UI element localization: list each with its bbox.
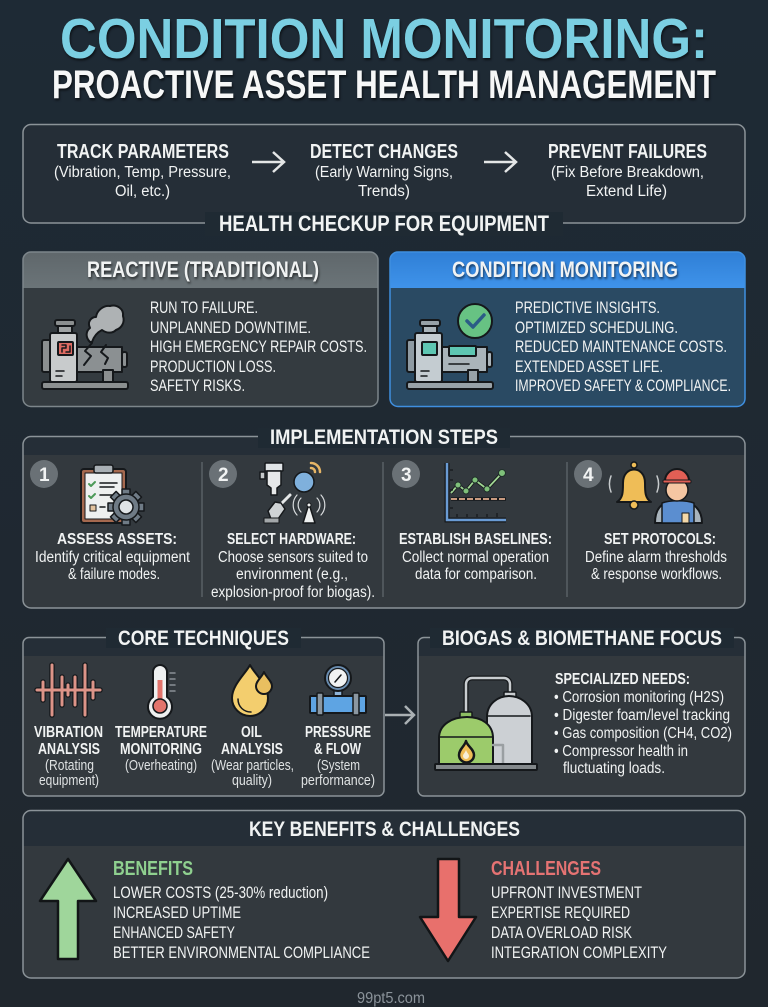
icon: baseline chart xyxy=(447,463,506,520)
step: detect changes: DETECT CHANGES xyxy=(310,141,458,163)
technique: pressure xyxy=(301,665,375,789)
badge 1 xyxy=(30,460,58,488)
text: challenges xyxy=(491,858,667,962)
text: temperature: MONITORING xyxy=(120,741,202,758)
text: reactive list: HIGH EMERGENCY REPAIR COSTS. xyxy=(150,338,367,356)
text: challenges: EXPERTISE REQUIRED xyxy=(491,904,630,922)
text: vibration: (Rotating xyxy=(45,757,94,774)
panel: implementation steps xyxy=(23,426,745,608)
badge 2: 2 xyxy=(218,465,229,486)
text: challenges: DATA OVERLOAD RISK xyxy=(491,924,632,942)
text: benefits: BENEFITS xyxy=(113,858,193,880)
step: track parameters: (Vibration, Temp, Pressure, xyxy=(54,164,231,181)
footer: site name: 99pt5.com xyxy=(357,990,425,1007)
title: CONDITION MONITORING: xyxy=(60,7,708,71)
text: benefits xyxy=(113,858,370,962)
badge 4 xyxy=(574,460,602,488)
text: pressure: PRESSURE xyxy=(305,724,371,741)
text: assess assets: & failure modes. xyxy=(68,566,160,583)
text: reactive list: SAFETY RISKS. xyxy=(150,377,245,395)
text: establish baselines xyxy=(399,531,552,583)
text: select hardware: Choose sensors suited to xyxy=(218,549,368,566)
heading: implementation steps: IMPLEMENTATION STEPS xyxy=(270,426,498,449)
text: benefits: BETTER ENVIRONMENTAL COMPLIANCE xyxy=(113,944,370,962)
badge 1: 1 xyxy=(39,465,50,486)
text: challenges: INTEGRATION COMPLEXITY xyxy=(491,944,667,962)
heading: key benefits and challenges: KEY BENEFITS & CHALLENGES xyxy=(249,818,520,841)
step: track parameters: TRACK PARAMETERS xyxy=(57,141,229,163)
heading: core techniques: CORE TECHNIQUES xyxy=(118,627,289,650)
step: detect changes: Trends) xyxy=(358,183,410,200)
text: benefits: LOWER COSTS (25-30% reduction) xyxy=(113,884,328,902)
icon: vibration wave xyxy=(37,665,100,715)
text: pressure: performance) xyxy=(301,772,375,789)
text: temperature: (Overheating) xyxy=(125,757,197,774)
text: reactive list xyxy=(150,299,367,395)
text: assess assets: ASSESS ASSETS: xyxy=(57,531,177,548)
badge 3 xyxy=(392,460,420,488)
text: specialized needs: • Compressor health in xyxy=(554,743,688,760)
step 1 xyxy=(30,460,191,583)
text: oil: (Wear particles, xyxy=(211,757,294,774)
heading: health checkup for equipment: HEALTH CHECKUP FOR EQUIPMENT xyxy=(219,211,549,236)
text: specialized needs: • Corrosion monitoring (H2S) xyxy=(554,689,724,706)
icon: digester tanks xyxy=(435,678,537,770)
text: monitoring list xyxy=(515,299,731,395)
arrow xyxy=(252,152,284,172)
text: set protocols: Define alarm thresholds xyxy=(585,549,727,566)
text: select hardware: explosion-proof for biogas). xyxy=(211,584,375,601)
panel: condition monitoring xyxy=(390,252,745,406)
text: specialized needs: • Gas composition (CH4, CO2) xyxy=(554,725,732,742)
step: track parameters xyxy=(54,141,231,200)
arrow: core to biogas xyxy=(385,706,414,724)
icon: broken pump xyxy=(42,306,128,389)
icon: pressure gauge on pipe xyxy=(310,665,366,715)
text: vibration: VIBRATION xyxy=(34,724,103,741)
text: select hardware: environment (e.g., xyxy=(236,566,348,583)
text: monitoring list: EXTENDED ASSET LIFE. xyxy=(515,358,663,376)
text: establish baselines: data for comparison. xyxy=(415,566,537,583)
step 4 xyxy=(574,460,727,583)
text: assess assets: Identify critical equipment xyxy=(35,549,191,566)
icon: up arrow xyxy=(40,859,96,959)
text: oil: OIL xyxy=(241,724,262,741)
text: monitoring list: OPTIMIZED SCHEDULING. xyxy=(515,319,678,337)
panel: biogas focus xyxy=(418,627,745,796)
text: assess assets xyxy=(35,531,191,583)
badge 4: 4 xyxy=(583,465,594,486)
title xyxy=(52,7,716,107)
arrow xyxy=(484,152,516,172)
icon: oil drops xyxy=(232,665,272,716)
text: oil xyxy=(211,724,294,789)
text: reactive list: UNPLANNED DOWNTIME. xyxy=(150,319,311,337)
text: set protocols: & response workflows. xyxy=(591,566,722,583)
text: select hardware: SELECT HARDWARE: xyxy=(227,531,356,548)
panel: core techniques xyxy=(23,627,384,796)
text: establish baselines: Collect normal operation xyxy=(402,549,549,566)
text: temperature xyxy=(115,724,207,774)
text: select hardware xyxy=(211,531,375,601)
step: prevent failures: Extend Life) xyxy=(586,183,667,200)
icon: checklist and gear xyxy=(81,465,144,525)
technique: vibration xyxy=(34,665,103,789)
step: detect changes xyxy=(310,141,458,200)
text: pressure xyxy=(301,724,375,789)
text: establish baselines: ESTABLISH BASELINES: xyxy=(399,531,552,548)
text: pressure: & FLOW xyxy=(314,741,362,758)
text: oil: quality) xyxy=(232,772,272,789)
icon: alarm bell and worker xyxy=(610,462,702,523)
icon: down arrow xyxy=(420,859,476,961)
icon: thermometer xyxy=(148,665,175,719)
text: specialized needs: SPECIALIZED NEEDS: xyxy=(555,671,690,688)
icon: healthy pump xyxy=(407,304,493,389)
text: challenges: CHALLENGES xyxy=(491,858,601,880)
technique: oil xyxy=(211,665,294,789)
text: set protocols xyxy=(585,531,727,583)
text: challenges: UPFRONT INVESTMENT xyxy=(491,884,642,902)
badge 3: 3 xyxy=(401,465,412,486)
step: prevent failures xyxy=(548,141,707,200)
step: track parameters: Oil, etc.) xyxy=(115,183,170,200)
text: monitoring list: PREDICTIVE INSIGHTS. xyxy=(515,299,660,317)
text: specialized needs: fluctuating loads. xyxy=(563,760,665,777)
panel: reactive xyxy=(23,252,378,406)
step: detect changes: (Early Warning Signs, xyxy=(315,164,453,181)
panel: benefits and challenges xyxy=(23,810,745,978)
heading: reactive: REACTIVE (TRADITIONAL) xyxy=(87,257,319,282)
text: set protocols: SET PROTOCOLS: xyxy=(604,531,716,548)
badge 2 xyxy=(209,460,237,488)
text: specialized needs xyxy=(554,671,732,777)
heading: condition monitoring: CONDITION MONITORING xyxy=(452,257,678,282)
heading: biogas focus: BIOGAS & BIOMETHANE FOCUS xyxy=(442,627,722,650)
text: specialized needs: • Digester foam/level tracking xyxy=(554,707,730,724)
text: benefits: ENHANCED SAFETY xyxy=(113,924,235,942)
icon: sensors xyxy=(260,463,325,523)
panel: health checkup xyxy=(23,124,745,236)
step 2 xyxy=(209,460,375,601)
technique: temperature xyxy=(115,665,207,774)
text: oil: ANALYSIS xyxy=(221,741,283,758)
text: reactive list: RUN TO FAILURE. xyxy=(150,299,258,317)
text: reactive list: PRODUCTION LOSS. xyxy=(150,358,276,376)
text: temperature: TEMPERATURE xyxy=(115,724,207,741)
text: vibration xyxy=(34,724,103,789)
text: pressure: (System xyxy=(317,757,360,774)
step: prevent failures: PREVENT FAILURES xyxy=(548,141,707,163)
step: prevent failures: (Fix Before Breakdown, xyxy=(551,164,704,181)
text: vibration: equipment) xyxy=(39,772,99,789)
step 3 xyxy=(392,460,552,583)
text: vibration: ANALYSIS xyxy=(38,741,100,758)
text: benefits: INCREASED UPTIME xyxy=(113,904,241,922)
